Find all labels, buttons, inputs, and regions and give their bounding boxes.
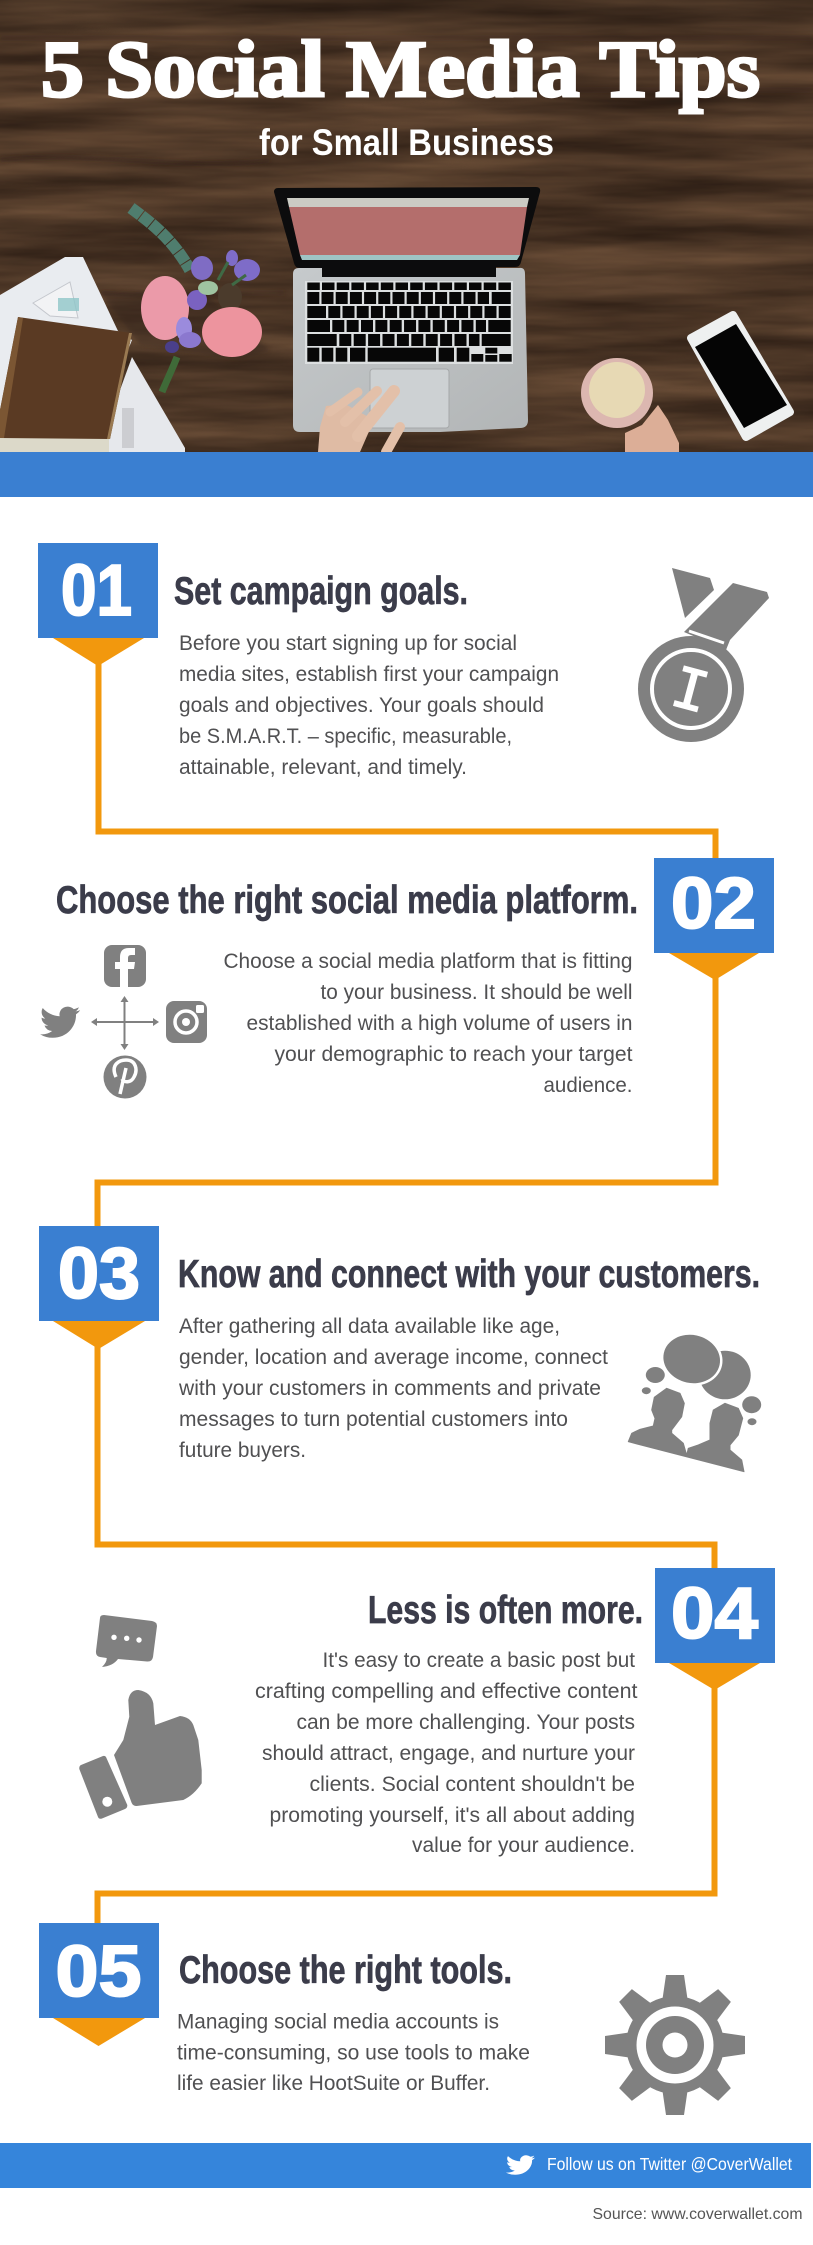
body text: your demographic to reach your target — [274, 1043, 633, 1066]
body text: Choose a social media platform that is fitting — [224, 950, 632, 973]
body text: promoting yourself, it's all about adding — [270, 1804, 635, 1827]
instagram icon — [166, 1001, 207, 1043]
step 1 panel — [38, 543, 769, 779]
body text: life easier like HootSuite or Buffer. — [177, 2072, 490, 2095]
four-way arrows — [91, 996, 159, 1050]
body text: clients. Social content shouldn't be — [310, 1773, 635, 1796]
body text — [179, 632, 559, 779]
body text — [255, 1649, 638, 1857]
body text: established with a high volume of users in — [246, 1012, 632, 1035]
body text: can be more challenging. Your posts — [296, 1711, 635, 1734]
number badge 04 — [655, 1568, 775, 1690]
number badge 05 — [39, 1923, 159, 2046]
pinterest icon — [104, 1056, 146, 1098]
twitter handle: Follow us on Twitter @CoverWallet — [547, 2154, 792, 2174]
laptop — [274, 187, 540, 432]
step 2 panel — [40, 858, 774, 1098]
body text: After gathering all data available like age, — [179, 1315, 560, 1338]
body text: media sites, establish first your campaign — [179, 663, 559, 686]
subtitle: for Small Business — [259, 122, 554, 163]
body text: to your business. It should be well — [320, 981, 632, 1004]
icon: thumbs up — [79, 1690, 202, 1819]
twitter icon — [40, 1007, 80, 1038]
icon: social network cross — [40, 945, 207, 1098]
papers — [0, 257, 185, 452]
body text: value for your audience. — [412, 1834, 635, 1857]
body text — [178, 1315, 608, 1462]
body text — [224, 950, 633, 1097]
body text: goals and objectives. Your goals should — [179, 694, 544, 717]
body text: Managing social media accounts is — [177, 2010, 499, 2034]
number badge 03: 03 — [58, 1234, 140, 1314]
flowers — [131, 208, 262, 392]
title: 5 Social Media Tips — [41, 26, 760, 114]
keyboard keys — [307, 286, 511, 340]
icon: gear — [605, 1975, 745, 2115]
icon: people talking — [628, 1327, 761, 1472]
heading: Set campaign goals. — [174, 570, 468, 613]
number badge 01 — [38, 543, 158, 666]
number badge 02: 02 — [671, 864, 756, 944]
body text: future buyers. — [179, 1439, 306, 1462]
heading: Choose the right tools. — [179, 1949, 512, 1992]
body text: with your customers in comments and private — [178, 1377, 601, 1400]
icon: medal — [638, 568, 769, 742]
body text: should attract, engage, and nurture your — [262, 1742, 635, 1765]
orange connector path — [98, 650, 716, 1935]
step 3 panel — [39, 1226, 761, 1472]
number badge 05: 05 — [56, 1932, 142, 2012]
icon: twitter bird — [506, 2155, 535, 2175]
heading: Choose the right social media platform. — [56, 879, 638, 922]
coffee cup and hand — [581, 358, 679, 452]
body text: be S.M.A.R.T. – specific, measurable, — [179, 725, 512, 748]
step 4 panel — [79, 1568, 775, 1857]
body text: attainable, relevant, and timely. — [179, 756, 467, 779]
number badge 02 — [654, 858, 774, 980]
number badge 01: 01 — [61, 551, 132, 631]
number badge 04: 04 — [671, 1574, 758, 1654]
phone — [691, 315, 790, 437]
body text: gender, location and average income, connect — [179, 1346, 608, 1369]
hand on trackpad — [318, 391, 400, 452]
body text: Before you start signing up for social — [179, 632, 517, 655]
body text: crafting compelling and effective content — [255, 1680, 638, 1703]
body text: time-consuming, so use tools to make — [177, 2042, 530, 2064]
facebook icon — [104, 945, 146, 987]
header photo: wooden desk with laptop — [0, 0, 813, 452]
body text — [177, 2010, 530, 2095]
heading: Less is often more. — [368, 1589, 643, 1632]
footer bar — [0, 2143, 811, 2188]
number badge 03 — [39, 1226, 159, 1349]
source line: Source: www.coverwallet.com — [592, 2206, 802, 2223]
body text: audience. — [544, 1074, 632, 1097]
step 5 panel — [39, 1923, 745, 2115]
icon: chat bubble — [96, 1615, 157, 1667]
blue banner under photo — [0, 452, 813, 497]
body text: It's easy to create a basic post but — [322, 1649, 635, 1672]
body text: messages to turn potential customers into — [179, 1408, 568, 1431]
notebook — [0, 317, 132, 439]
